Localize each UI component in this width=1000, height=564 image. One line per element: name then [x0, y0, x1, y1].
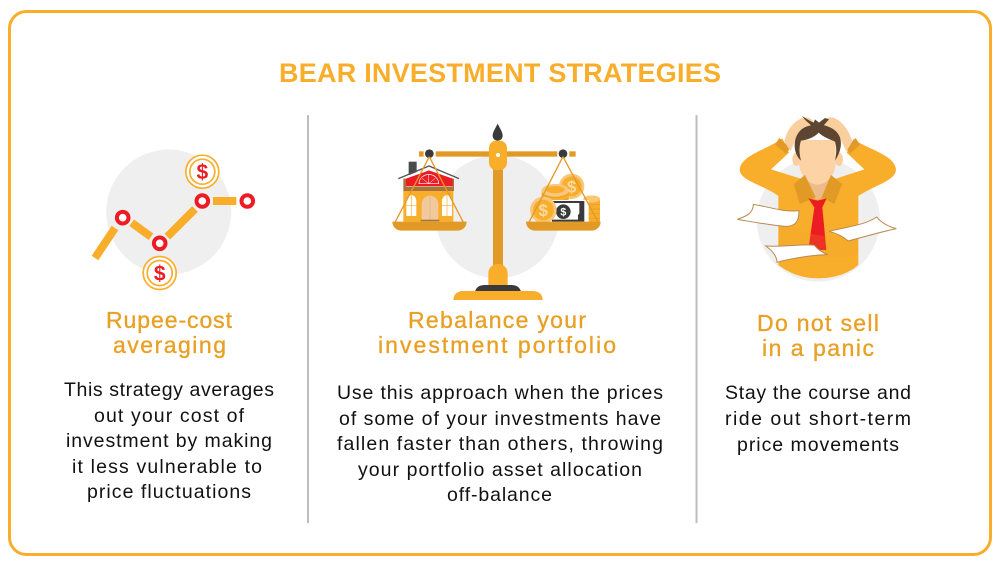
heading: rebalance: [378, 307, 616, 358]
text block: do not sell description: price movements: [737, 434, 899, 456]
text block: rebalance description: your portfolio asset allocation: [358, 459, 642, 481]
heading: rupee-cost averaging: [106, 307, 233, 358]
hands: [784, 117, 814, 151]
panel: do not sell in a panic: [725, 116, 911, 456]
money and coins: $: [567, 177, 577, 196]
text block: do not sell description: Stay the course and: [725, 382, 911, 404]
paper: [766, 245, 828, 262]
heading: do not sell: in a panic: [762, 335, 874, 361]
icon: line chart with coins: $: [196, 161, 208, 184]
heading: do not sell: Do not sell: [757, 310, 879, 336]
text block: rupee-cost description: This strategy averages: [64, 379, 274, 401]
text block: rupee-cost description: [64, 379, 274, 503]
icon: balance scale with house and money: [392, 124, 601, 300]
heading: rebalance: investment portfolio: [378, 332, 616, 358]
money and coins: [530, 174, 600, 223]
text block: rebalance description: fallen faster than others, throwing: [337, 433, 663, 455]
text block: rebalance description: of some of your investments have: [339, 408, 661, 430]
text block: rupee-cost description: price fluctuations: [87, 481, 251, 503]
text block: rupee-cost description: out your cost of: [94, 405, 245, 427]
text block: rebalance description: [337, 382, 663, 506]
tie: [808, 198, 827, 250]
icon: line chart with coins: [95, 150, 253, 290]
title: BEAR INVESTMENT STRATEGIES: [279, 58, 721, 88]
heading: rebalance: Rebalance your: [408, 307, 586, 333]
heading: rupee-cost averaging: Rupee-cost: [106, 307, 233, 333]
text block: do not sell description: [725, 382, 911, 456]
paper: [829, 217, 896, 241]
money and coins: $: [539, 201, 549, 220]
icon: line chart with coins: $: [154, 262, 166, 286]
text block: rupee-cost description: investment by making: [66, 430, 272, 452]
panel: rupee-cost averaging: [64, 150, 274, 503]
text block: rebalance description: Use this approach when the prices: [337, 382, 663, 404]
house: [398, 162, 459, 222]
text block: do not sell description: ride out short-term: [725, 408, 911, 430]
heading: do not sell: [757, 310, 879, 361]
heading: rupee-cost averaging: averaging: [113, 332, 226, 358]
panel: rebalance portfolio: [337, 124, 663, 506]
icon: panicked man with papers: [737, 116, 896, 282]
body and arms: [740, 138, 896, 278]
text block: rupee-cost description: it less vulnerable to: [72, 456, 262, 478]
money and coins: $: [560, 207, 566, 219]
text block: rebalance description: off-balance: [447, 484, 552, 506]
paper: [737, 204, 799, 226]
